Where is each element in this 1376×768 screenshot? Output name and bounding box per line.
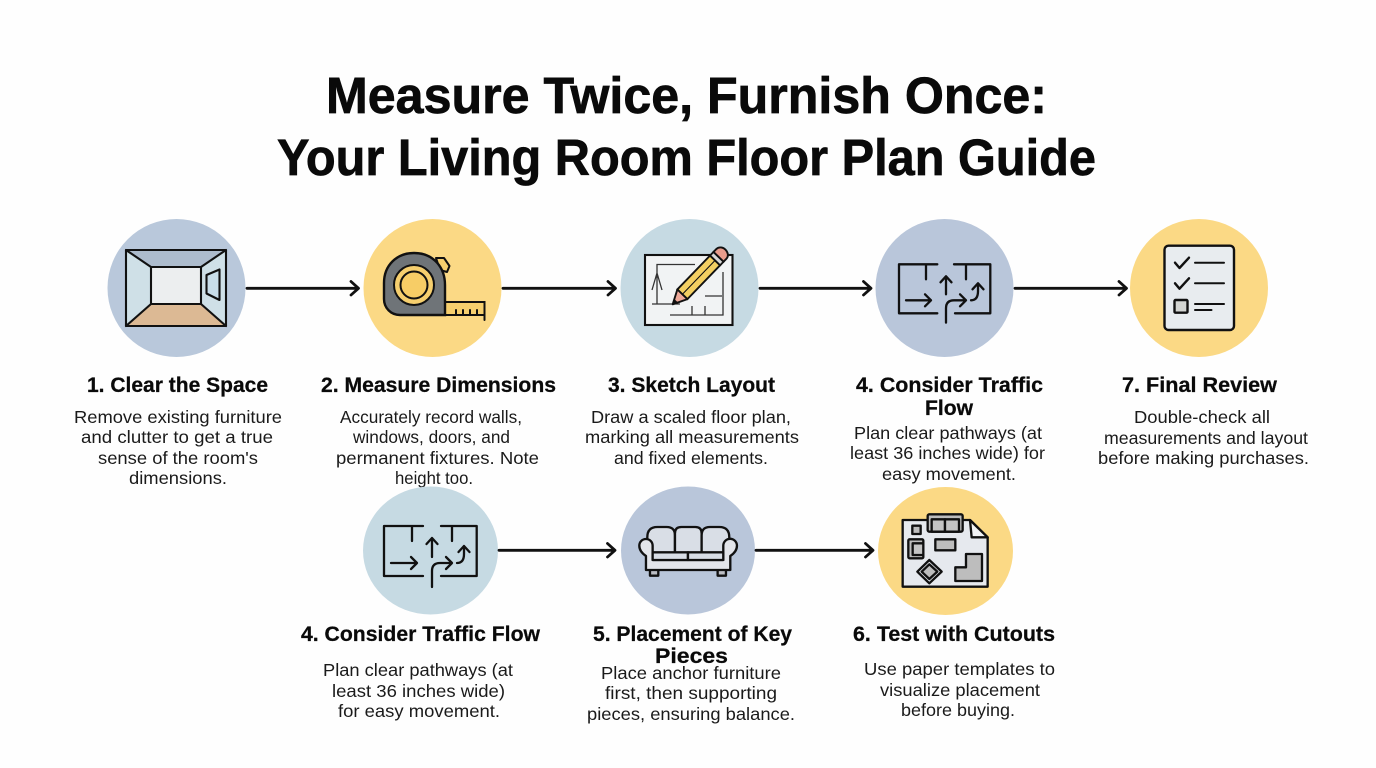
heading: step 3: 3. Sketch Layout: [608, 374, 775, 397]
step 7: final review: [1098, 219, 1309, 468]
text: step 4 bottom description: [323, 660, 513, 721]
icon: empty room: [108, 219, 246, 357]
arrow: step 1 to 2: [247, 282, 358, 295]
icon: floor plan with pencil: [620, 219, 758, 357]
step 3: sketch layout: [585, 219, 799, 468]
text: step 6 description: [864, 659, 1055, 720]
heading: step 5: Pieces: [655, 645, 728, 668]
heading: step 4 top: [856, 374, 1043, 420]
text: step 1 description: Remove existing furniture: [74, 407, 282, 427]
arrow: step 3 to 4: [760, 282, 871, 295]
icon: sofa: [621, 486, 755, 614]
text: step 3 description: marking all measurements: [585, 427, 799, 447]
heading: step 1: 1. Clear the Space: [87, 374, 268, 397]
text: step 7 description: Double-check all: [1134, 407, 1270, 427]
heading: step 5: [593, 623, 792, 668]
step 2: measure dimensions: [321, 219, 556, 488]
title: [277, 67, 1096, 186]
text: step 4 bottom description: least 36 inches wide): [332, 681, 505, 701]
text: step 4 top description: easy movement.: [882, 464, 1016, 484]
text: step 5 description: Place anchor furniture: [601, 663, 781, 683]
text: step 6 description: Use paper templates to: [864, 659, 1055, 679]
text: step 1 description: sense of the room's: [98, 448, 258, 468]
text: step 4 bottom description: for easy movement.: [338, 701, 500, 721]
text: step 7 description: [1098, 407, 1309, 468]
heading: step 4 top: 4. Consider Traffic: [856, 374, 1043, 397]
text: step 2 description: Accurately record walls,: [340, 407, 522, 427]
icon: traffic flow plan: [876, 219, 1014, 357]
heading: step 4 bottom: 4. Consider Traffic Flow: [301, 623, 541, 646]
heading: step 4 top: Flow: [925, 397, 974, 420]
heading: step 6: 6. Test with Cutouts: [853, 623, 1055, 646]
heading: step 2: 2. Measure Dimensions: [321, 374, 556, 397]
icon: traffic flow plan: [363, 486, 498, 614]
text: step 7 description: before making purchases.: [1098, 448, 1309, 468]
text: step 4 top description: [850, 423, 1045, 484]
text: step 1 description: [74, 407, 282, 488]
text: step 2 description: [336, 407, 539, 488]
arrow: step 2 to 3: [503, 282, 616, 295]
step 1: clear the space: [74, 219, 282, 488]
arrow: step 4 to 7: [1015, 282, 1126, 295]
text: step 6 description: visualize placement: [880, 680, 1040, 700]
text: step 3 description: Draw a scaled floor plan,: [591, 407, 791, 427]
text: step 7 description: measurements and layout: [1104, 428, 1308, 448]
text: step 5 description: first, then supporting: [605, 683, 777, 703]
icon: checklist: [1130, 219, 1268, 357]
step 5: placement of key pieces: [587, 486, 795, 724]
text: step 3 description: and fixed elements.: [614, 448, 768, 468]
text: step 2 description: permanent fixtures. Note: [336, 448, 539, 468]
arrow: step 4 to 5: [499, 544, 615, 557]
icon: tape measure: [364, 219, 502, 357]
icon: furniture cutouts on plan: [878, 487, 1013, 615]
title: Measure Twice, Furnish Once:: [326, 67, 1047, 124]
text: step 6 description: before buying.: [901, 700, 1015, 720]
heading: step 5: 5. Placement of Key: [593, 623, 792, 646]
step 4 top: consider traffic flow: [850, 219, 1045, 484]
text: step 4 top description: Plan clear pathways (at: [854, 423, 1042, 443]
text: step 5 description: pieces, ensuring balance.: [587, 704, 795, 724]
text: step 2 description: windows, doors, and: [352, 427, 510, 447]
text: step 1 description: and clutter to get a true: [81, 427, 273, 447]
text: step 4 bottom description: Plan clear pathways (at: [323, 660, 513, 680]
step 4 bottom: consider traffic flow: [301, 486, 541, 721]
step 6: test with cutouts: [853, 487, 1055, 720]
arrow: step 5 to 6: [756, 544, 873, 557]
text: step 3 description: [585, 407, 799, 468]
title: Your Living Room Floor Plan Guide: [277, 129, 1096, 186]
heading: step 7: 7. Final Review: [1122, 374, 1278, 397]
text: step 2 description: height too.: [395, 468, 473, 488]
text: step 4 top description: least 36 inches wide) for: [850, 443, 1045, 463]
text: step 5 description: [587, 663, 795, 724]
text: step 1 description: dimensions.: [129, 468, 227, 488]
